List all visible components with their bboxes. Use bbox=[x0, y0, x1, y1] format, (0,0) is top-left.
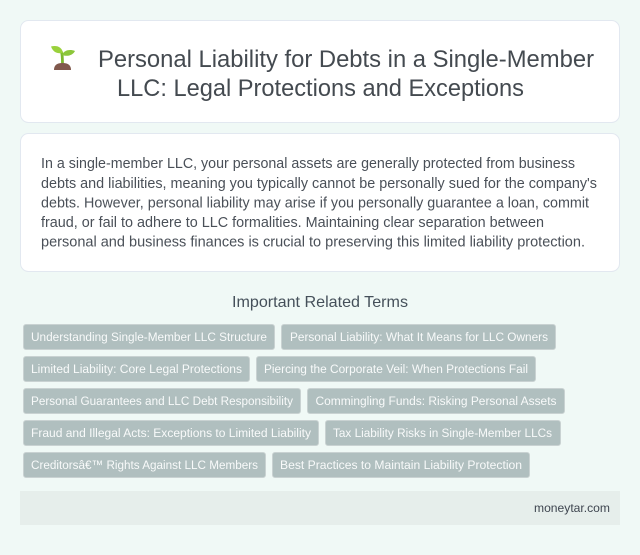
title: Personal Liability for Debts in a Single-Member bbox=[98, 46, 594, 73]
chip: personal guarantees: Personal Guarantees and LLC Debt Responsibility bbox=[31, 394, 294, 408]
chip: commingling funds bbox=[308, 388, 564, 414]
chip: creditors bbox=[24, 452, 266, 478]
heading: related terms: Important Related Terms bbox=[232, 294, 408, 311]
panel: summary card bbox=[20, 134, 620, 272]
chip: tax liability: Tax Liability Risks in Single-Member LLCs bbox=[333, 426, 552, 440]
summary text: debts and liabilities, meaning you typically cannot be personally sued for the company's bbox=[41, 176, 597, 192]
chip: commingling funds: Commingling Funds: Risking Personal Assets bbox=[316, 394, 556, 408]
title: LLC: Legal Protections and Exceptions bbox=[117, 75, 524, 102]
chip: corporate veil bbox=[256, 356, 536, 382]
chip: limited liability bbox=[24, 356, 250, 382]
summary text: debts. However, personal liability may arise if you personally guarantee a loan, commit bbox=[41, 196, 589, 212]
summary text: fraud, or fail to adhere to LLC formalities. Maintaining clear separation between bbox=[41, 215, 544, 231]
chip: personal liability: Personal Liability: What It Means for LLC Owners bbox=[290, 330, 548, 344]
summary text: personal and business finances is crucial to preserving this limited liability protection. bbox=[41, 234, 585, 250]
chip: fraud: Fraud and Illegal Acts: Exceptions to Limited Liability bbox=[31, 426, 312, 440]
panel: title card bbox=[20, 20, 620, 122]
chip: limited liability: Limited Liability: Core Legal Protections bbox=[31, 362, 242, 376]
summary text: In a single-member LLC, your personal assets are generally protected from business bbox=[41, 156, 575, 172]
summary text bbox=[41, 156, 597, 250]
chip: fraud bbox=[24, 420, 318, 446]
chip: corporate veil: Piercing the Corporate Veil: When Protections Fail bbox=[264, 362, 528, 376]
footer: site name: moneytar.com bbox=[534, 501, 610, 515]
chip: personal guarantees bbox=[24, 388, 300, 414]
chip: tax liability bbox=[326, 420, 560, 446]
chip: best practices: Best Practices to Maintain Liability Protection bbox=[280, 458, 522, 472]
footer bbox=[20, 491, 620, 525]
chip: best practices bbox=[272, 452, 530, 478]
chip: LLC structure bbox=[24, 324, 274, 350]
chip: creditors: Creditorsâ€™ Rights Against LLC Members bbox=[31, 458, 258, 472]
icon: seedling bbox=[51, 46, 75, 70]
title bbox=[98, 46, 594, 102]
chip: personal liability bbox=[282, 324, 556, 350]
chip: LLC structure: Understanding Single-Member LLC Structure bbox=[31, 330, 267, 344]
related terms chips bbox=[24, 324, 564, 478]
